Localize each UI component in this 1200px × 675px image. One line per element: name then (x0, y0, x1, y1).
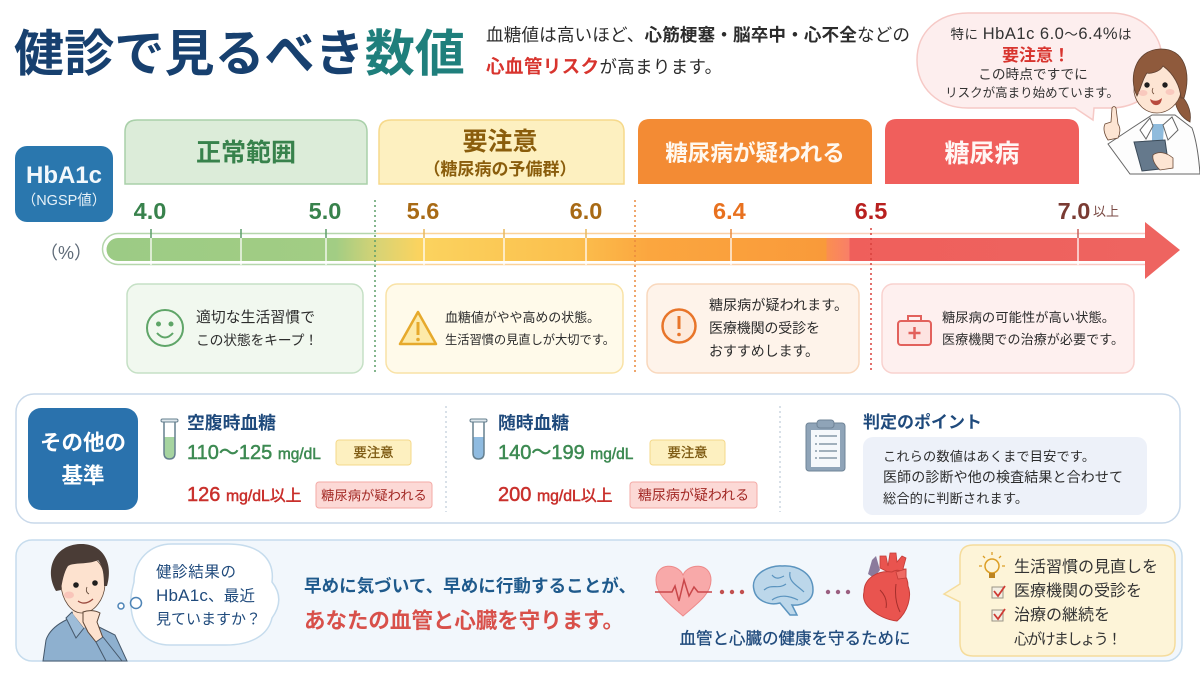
neck (72, 606, 94, 628)
head (61, 556, 105, 613)
random glucose: 要注意 (668, 445, 707, 460)
thought bubble: HbA1c、最近 (156, 586, 255, 605)
key message: あなたの血管と心臓を守ります。 (304, 609, 624, 633)
scale numbers (134, 198, 1119, 224)
label: other criteria: 基準 (61, 464, 105, 488)
icon: warning (400, 312, 436, 344)
unit label: （%） (40, 243, 92, 263)
label: other criteria: その他の (40, 431, 126, 455)
scale arrow bar (102, 222, 1180, 279)
card: normal: 適切な生活習慣で (196, 308, 315, 326)
label: other criteria (28, 408, 138, 510)
judgement point: これらの数値はあくまで目安です。 (883, 449, 1095, 464)
fasting glucose: 空腹時血糖 (187, 413, 276, 433)
panel: bottom message (16, 540, 1182, 661)
judgement point: 総合的に判断されます。 (883, 491, 1028, 506)
label: HbA1c: （NGSP値） (22, 192, 106, 209)
pointing hand (1104, 106, 1120, 140)
fasting glucose (187, 413, 432, 508)
intro text: 血糖値は高いほど、心筋梗塞・脳卒中・心不全などの (486, 25, 910, 45)
icon: green test tube (161, 419, 178, 459)
icon: exclamation (662, 310, 696, 342)
card: diabetes: 医療機関での治療が必要です。 (942, 332, 1124, 347)
key message (304, 576, 636, 633)
scale numbers: 6.0 (570, 198, 602, 224)
random glucose (498, 413, 757, 508)
icon: light bulb (979, 552, 1005, 578)
card: caution: 生活習慣の見直しが大切です。 (445, 332, 615, 347)
card: normal: この状態をキープ！ (196, 333, 318, 348)
icon: man thinking (43, 544, 127, 661)
fasting glucose: 糖尿病が疑われる (321, 488, 427, 503)
scale numbers: 5.6 (407, 198, 439, 224)
speech bubble: doctor: 要注意！ (1002, 46, 1070, 65)
callout: lifestyle advice: 心がけましょう！ (1014, 631, 1122, 648)
header: 要注意: （糖尿病の予備群） (424, 159, 576, 179)
speech bubble: doctor: リスクが高まり始めています。 (945, 85, 1119, 100)
icon: checkbox (992, 586, 1005, 598)
card: diabetes: 糖尿病の可能性が高い状態。 (942, 309, 1115, 325)
icon: blue test tube (470, 419, 487, 459)
icon: brain (753, 566, 813, 615)
range dividers (375, 200, 871, 372)
header: 正常範囲: 正常範囲 (196, 139, 296, 167)
label: HbA1c: HbA1c (26, 162, 102, 189)
card: suspected: 医療機関の受診を (709, 320, 820, 336)
icon: heart with pulse (655, 566, 712, 616)
card: suspected: 糖尿病が疑われます。 (709, 297, 848, 313)
panel: other criteria (16, 394, 1180, 523)
icon: clipboard (806, 420, 845, 471)
scale numbers: 6.4 (713, 198, 746, 224)
scale numbers: 4.0 (134, 198, 166, 224)
scrubs (1152, 124, 1164, 142)
ponytail (1175, 94, 1190, 122)
intro text: 心血管リスクが高まります。 (486, 56, 722, 77)
header: 糖尿病が疑われる: 糖尿病が疑われる (665, 140, 845, 166)
key message: 早めに気づいて、早めに行動することが、 (304, 576, 636, 596)
callout: lifestyle advice (944, 545, 1175, 656)
head (1134, 58, 1181, 113)
dots (720, 590, 744, 594)
judgement point: 医師の診断や他の検査結果と合わせて (883, 469, 1123, 485)
header: 正常範囲 (125, 120, 367, 184)
header: 糖尿病が疑われる (638, 119, 872, 184)
fasting glucose: 要注意 (354, 445, 393, 460)
thought bubble: 健診結果の (156, 563, 236, 581)
icon: checkbox (992, 609, 1005, 621)
callout: lifestyle advice: 医療機関の受診を (1014, 582, 1142, 600)
header: 糖尿病 (885, 119, 1079, 184)
callout: lifestyle advice: 治療の継続を (1014, 606, 1110, 624)
card: diabetes (882, 284, 1134, 373)
card: normal (127, 284, 363, 373)
thought bubble: 見ていますか？ (156, 611, 261, 628)
header: 糖尿病: 糖尿病 (944, 140, 1020, 168)
fasting glucose: 110〜125 mg/dL (187, 442, 321, 464)
card: caution: 血糖値がやや高めの状態。 (445, 310, 600, 325)
icon: smile (147, 310, 183, 346)
clipboard (1134, 140, 1169, 171)
speech bubble: doctor: 特に HbA1c 6.0〜6.4%は (950, 25, 1132, 43)
scale numbers: 7.0 (1058, 198, 1090, 224)
icon: medical kit (898, 316, 931, 345)
intro text (486, 25, 910, 77)
scale numbers: 5.0 (309, 198, 341, 224)
random glucose: 200 mg/dL以上 (498, 484, 612, 506)
hair (1133, 49, 1187, 98)
caption: 血管と心臓の健康を守るために (680, 629, 910, 648)
title: 健診で見るべき数値 (14, 26, 465, 82)
icon: doctor (1104, 49, 1200, 174)
fasting glucose: 126 mg/dL以上 (187, 484, 301, 506)
label: HbA1c (15, 146, 113, 222)
divider (779, 406, 781, 512)
header: 要注意 (379, 120, 624, 184)
thought bubble (118, 544, 279, 645)
scale numbers: 6.5 (855, 198, 887, 224)
card: suspected (647, 284, 859, 373)
hand (83, 611, 103, 642)
card: caution (386, 284, 623, 373)
card: suspected: おすすめします。 (709, 343, 819, 359)
speech bubble: doctor: この時点ですでに (978, 67, 1088, 82)
hair (51, 544, 109, 591)
speech bubble: doctor (917, 13, 1162, 120)
dots (826, 590, 850, 594)
judgement point: 判定のポイント (863, 412, 982, 432)
callout: lifestyle advice: 生活習慣の見直しを (1014, 558, 1158, 576)
shirt (43, 614, 127, 661)
white coat (1108, 115, 1200, 174)
judgement point (863, 412, 1147, 515)
random glucose: 随時血糖 (498, 413, 569, 433)
divider (445, 406, 447, 512)
header: 要注意: 要注意 (462, 128, 538, 156)
scale tick marks (151, 229, 1078, 265)
scale numbers: 以上 (1093, 204, 1119, 219)
random glucose: 糖尿病が疑われる (638, 487, 749, 503)
random glucose: 140〜199 mg/dL (498, 442, 634, 464)
icon: anatomical heart (864, 553, 910, 621)
hand on clipboard (1153, 153, 1173, 170)
